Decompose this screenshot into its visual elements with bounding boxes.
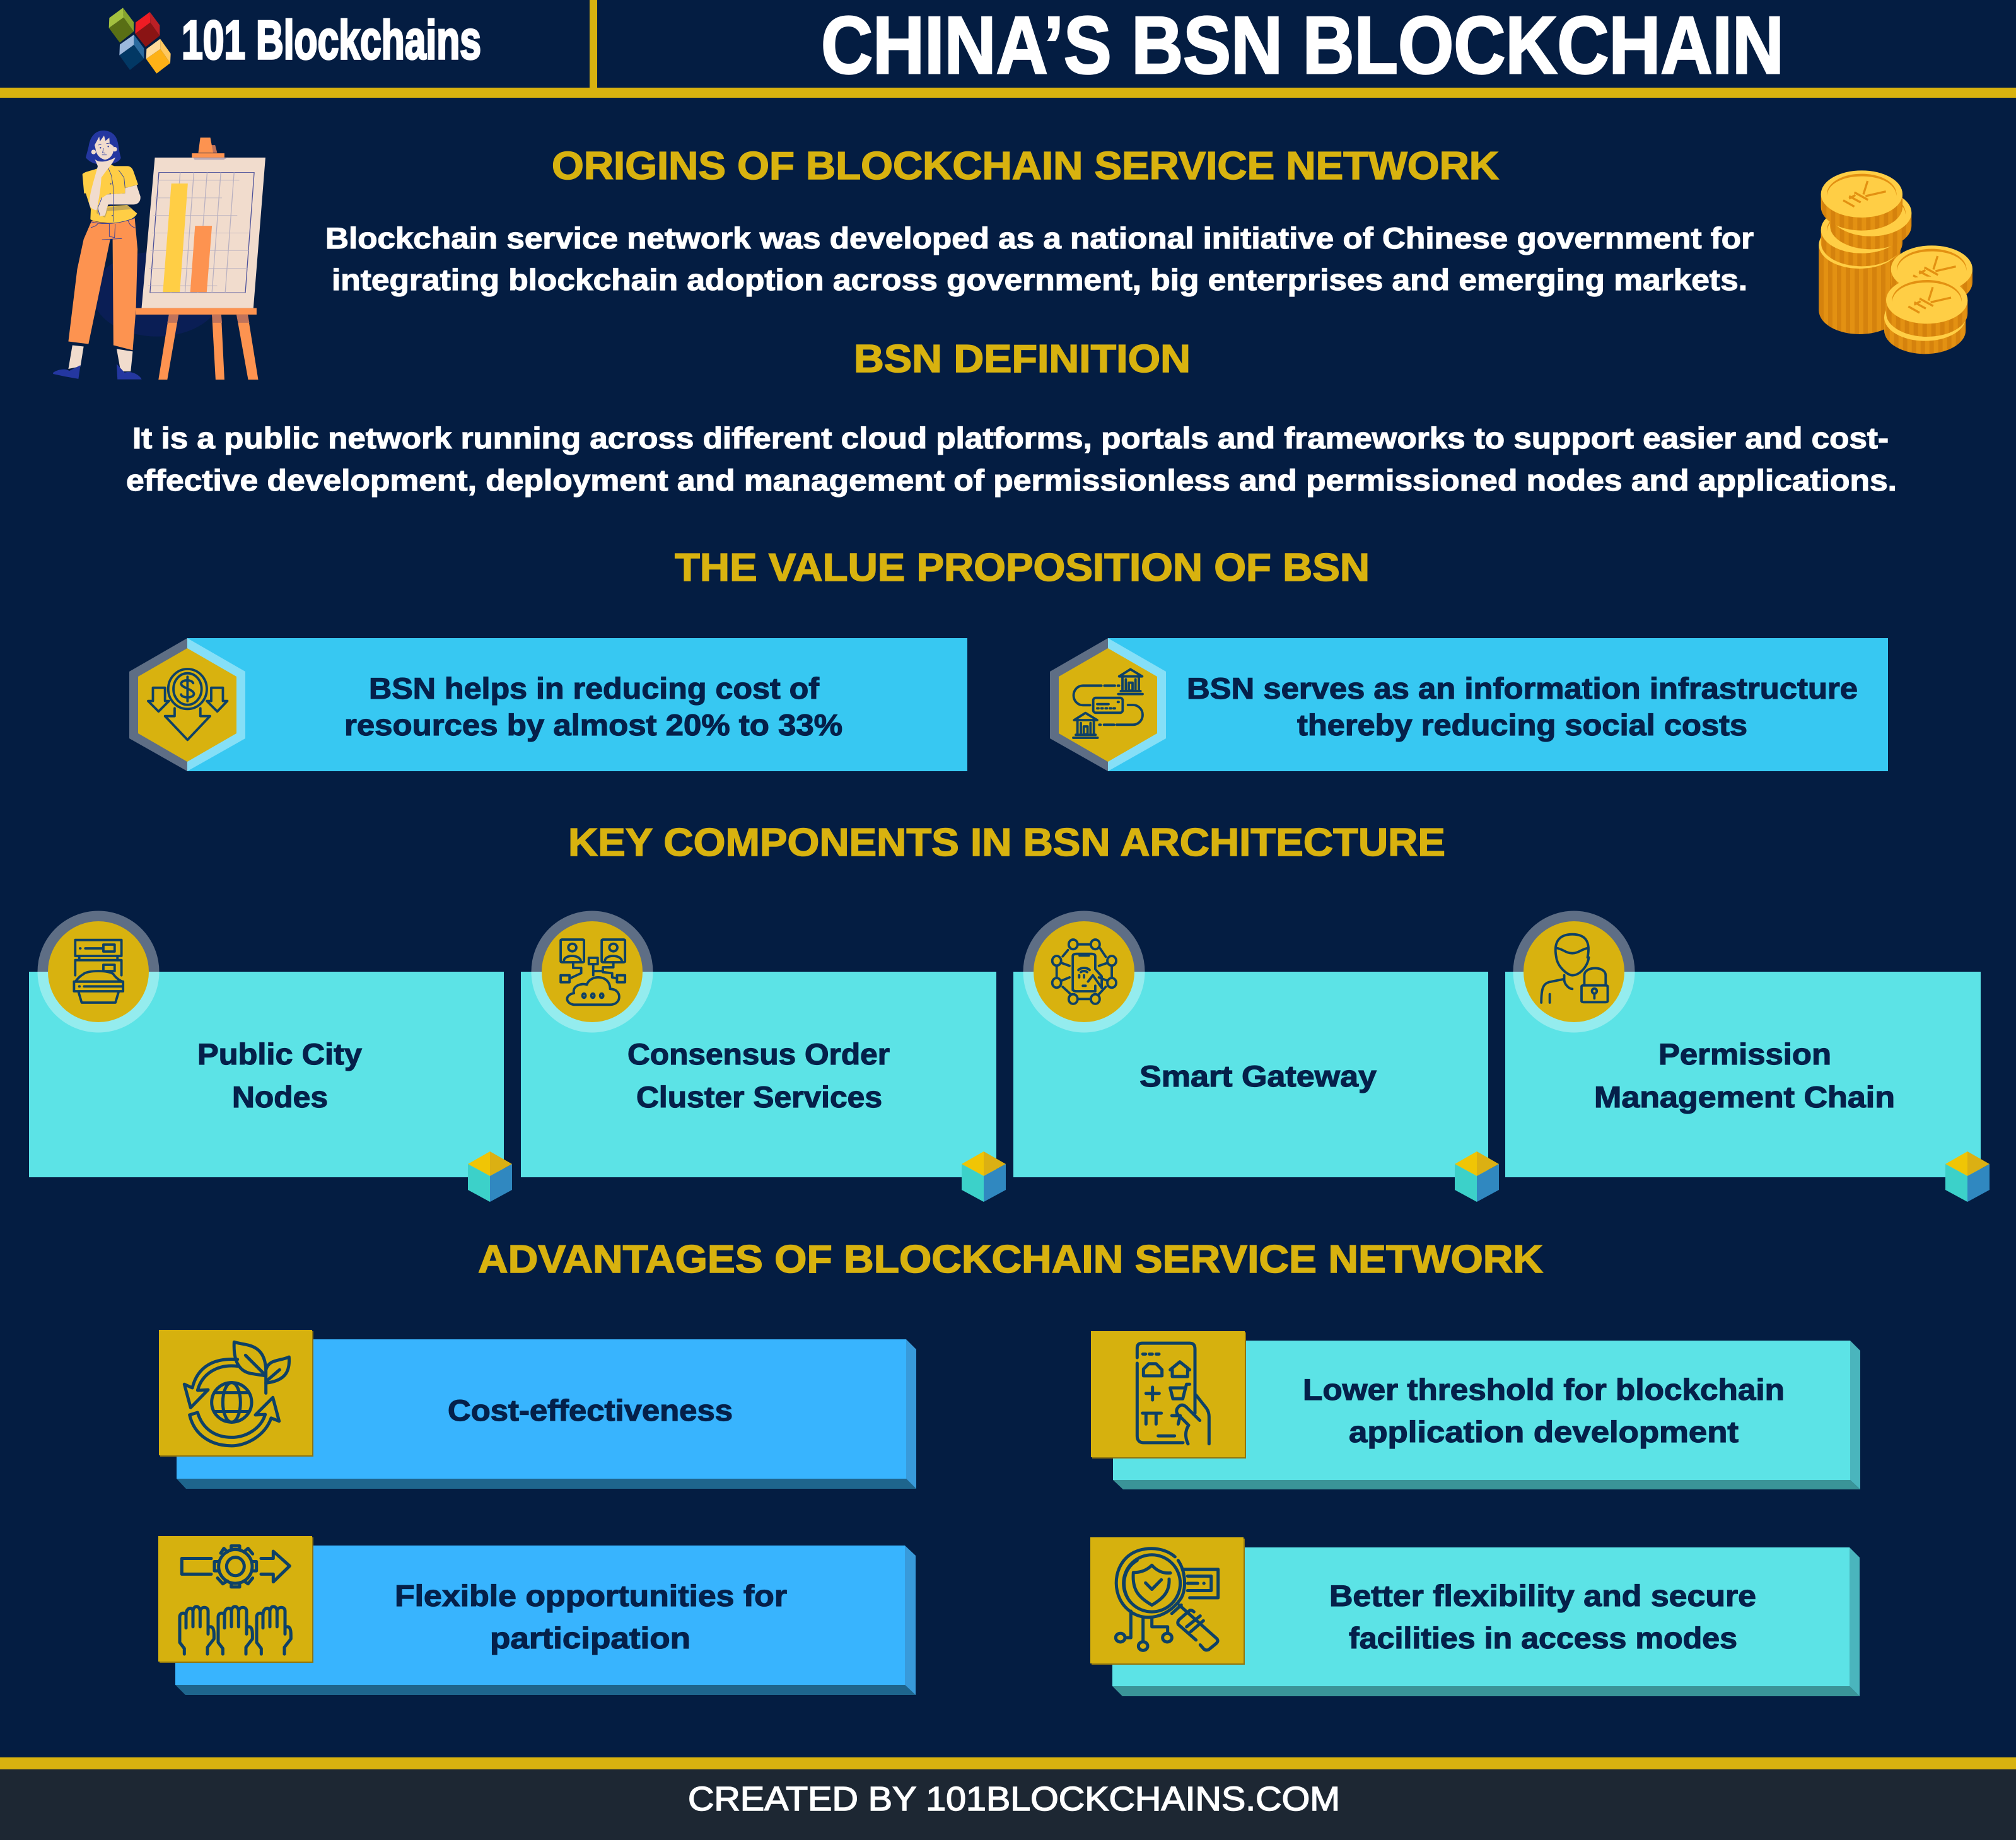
text: Smart Gateway xyxy=(1139,1059,1377,1093)
icon: magnifier shield xyxy=(1116,1549,1218,1650)
text: Lower threshold for blockchain xyxy=(1303,1373,1785,1406)
icon: user with lock xyxy=(1541,935,1607,1003)
logo: 101 Blockchains: 101 Blockchains xyxy=(182,10,481,71)
text xyxy=(344,672,842,742)
panel: Flexible opportunities xyxy=(158,1536,916,1695)
icon: server stack xyxy=(74,940,123,1003)
text xyxy=(197,1037,362,1114)
panel: Cost-effectiveness xyxy=(159,1330,916,1489)
text: Flexible opportunities for xyxy=(395,1579,787,1612)
origins paragraph: integrating blockchain adoption across government, big enterprises and emerging markets. xyxy=(332,263,1747,296)
panel: Lower threshold xyxy=(1091,1331,1860,1489)
text xyxy=(627,1037,890,1114)
panel: Smart Gateway xyxy=(1013,911,1499,1202)
text xyxy=(395,1579,787,1655)
origins paragraph xyxy=(325,221,1754,296)
text: Consensus Order xyxy=(627,1037,890,1071)
icon: recycling globe and leaf xyxy=(184,1342,289,1446)
panel: value proposition 2 xyxy=(1050,638,1888,771)
text: facilities in access modes xyxy=(1349,1621,1737,1655)
footer credit: CREATED BY 101BLOCKCHAINS.COM xyxy=(688,1780,1340,1818)
text: BSN serves as an information infrastructure xyxy=(1187,672,1858,705)
text: Nodes xyxy=(232,1080,328,1114)
text: Management Chain xyxy=(1594,1080,1895,1114)
text: Better flexibility and secure xyxy=(1329,1579,1756,1612)
panel: value proposition 1 xyxy=(129,638,967,771)
text: Cost-effectiveness xyxy=(448,1394,733,1427)
panel: Public City Nodes xyxy=(29,911,512,1202)
header band xyxy=(0,0,2016,98)
illustration: stacked yuan coins xyxy=(1819,170,1972,354)
icon: banks and card xyxy=(1073,669,1143,738)
text: Permission xyxy=(1658,1037,1831,1071)
heading: BSN definition: BSN DEFINITION xyxy=(854,337,1191,381)
origins paragraph: Blockchain service network was developed as a national initiative of Chinese government for xyxy=(325,221,1754,255)
text: thereby reducing social costs xyxy=(1297,708,1747,742)
illustration: woman with chart easel xyxy=(53,131,265,380)
heading: advantages: ADVANTAGES OF BLOCKCHAIN SERVICE NETWORK xyxy=(478,1238,1543,1281)
definition paragraph xyxy=(126,421,1897,497)
panel: Better flexibility xyxy=(1090,1537,1860,1696)
text: application development xyxy=(1349,1415,1739,1448)
title: CHINA’S BSN BLOCKCHAIN xyxy=(821,0,1784,91)
icon: coin with down arrows xyxy=(148,669,227,740)
text: Public City xyxy=(197,1037,362,1071)
icon: cube xyxy=(1945,1151,1990,1202)
text: BSN helps in reducing cost of xyxy=(369,672,819,705)
icon: phone network xyxy=(1052,940,1116,1004)
text: participation xyxy=(490,1621,690,1655)
text xyxy=(1187,672,1858,742)
logo: 101 Blockchains xyxy=(109,8,481,74)
definition paragraph: It is a public network running across different cloud platforms, portals and frameworks to support easier and cost- xyxy=(132,421,1889,455)
text xyxy=(1303,1373,1785,1448)
icon: phone with apps xyxy=(1137,1343,1209,1444)
icon: users and cloud network xyxy=(561,940,625,1004)
heading: key components: KEY COMPONENTS IN BSN ARCHITECTURE xyxy=(568,821,1445,865)
icon: gear process and hands xyxy=(180,1546,291,1654)
heading: value proposition: THE VALUE PROPOSITION OF BSN xyxy=(675,546,1370,590)
panel: Permission Management Chain xyxy=(1505,911,1990,1202)
heading: origins: ORIGINS OF BLOCKCHAIN SERVICE NETWORK xyxy=(552,144,1499,188)
footer xyxy=(0,1757,2016,1840)
text xyxy=(1329,1579,1756,1655)
text: resources by almost 20% to 33% xyxy=(344,708,842,742)
text xyxy=(1594,1037,1895,1114)
icon: cube xyxy=(1455,1151,1499,1202)
text: Cluster Services xyxy=(636,1080,882,1114)
icon: cube xyxy=(468,1151,512,1202)
panel: Consensus Order Cluster Services xyxy=(521,911,1006,1202)
definition paragraph: effective development, deployment and management of permissionless and permissioned nodes and applications. xyxy=(126,463,1897,497)
icon: cube xyxy=(962,1151,1006,1202)
